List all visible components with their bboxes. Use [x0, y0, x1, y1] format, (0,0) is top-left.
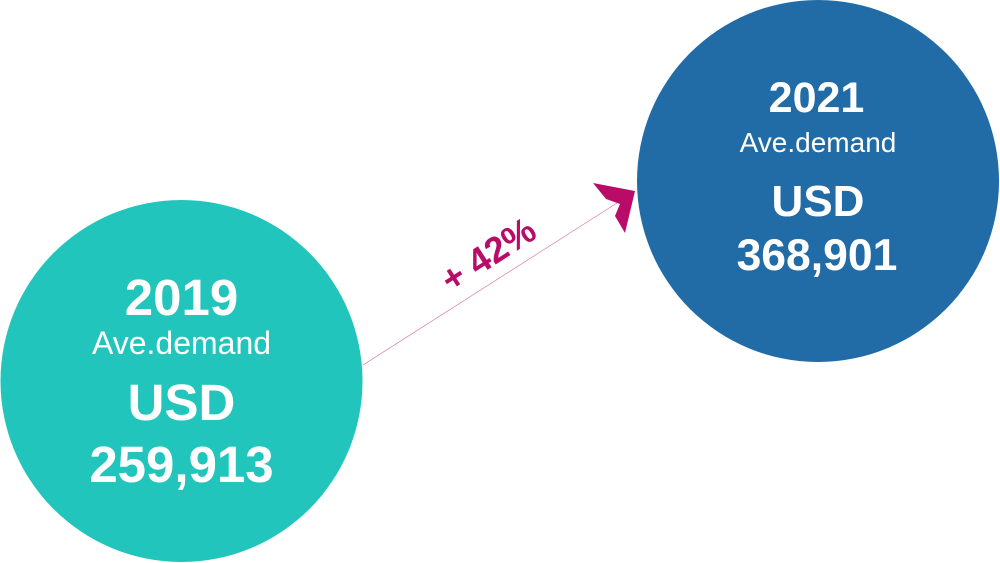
panel: 2019 circle	[0, 200, 362, 562]
year 2019: 2019	[125, 269, 238, 326]
year 2021: 2021	[769, 74, 864, 122]
callout: +42%: + 42%	[433, 209, 543, 300]
label Ave.demand 2019: Ave.demand	[92, 325, 271, 361]
currency USD 2021: USD	[772, 177, 864, 226]
arrow: growth	[363, 183, 635, 365]
label Ave.demand 2021: Ave.demand	[740, 127, 896, 158]
value 259,913: 259,913	[89, 436, 274, 493]
value 368,901: 368,901	[737, 231, 897, 280]
panel: 2021 circle	[637, 0, 999, 362]
currency USD 2019: USD	[128, 374, 235, 431]
